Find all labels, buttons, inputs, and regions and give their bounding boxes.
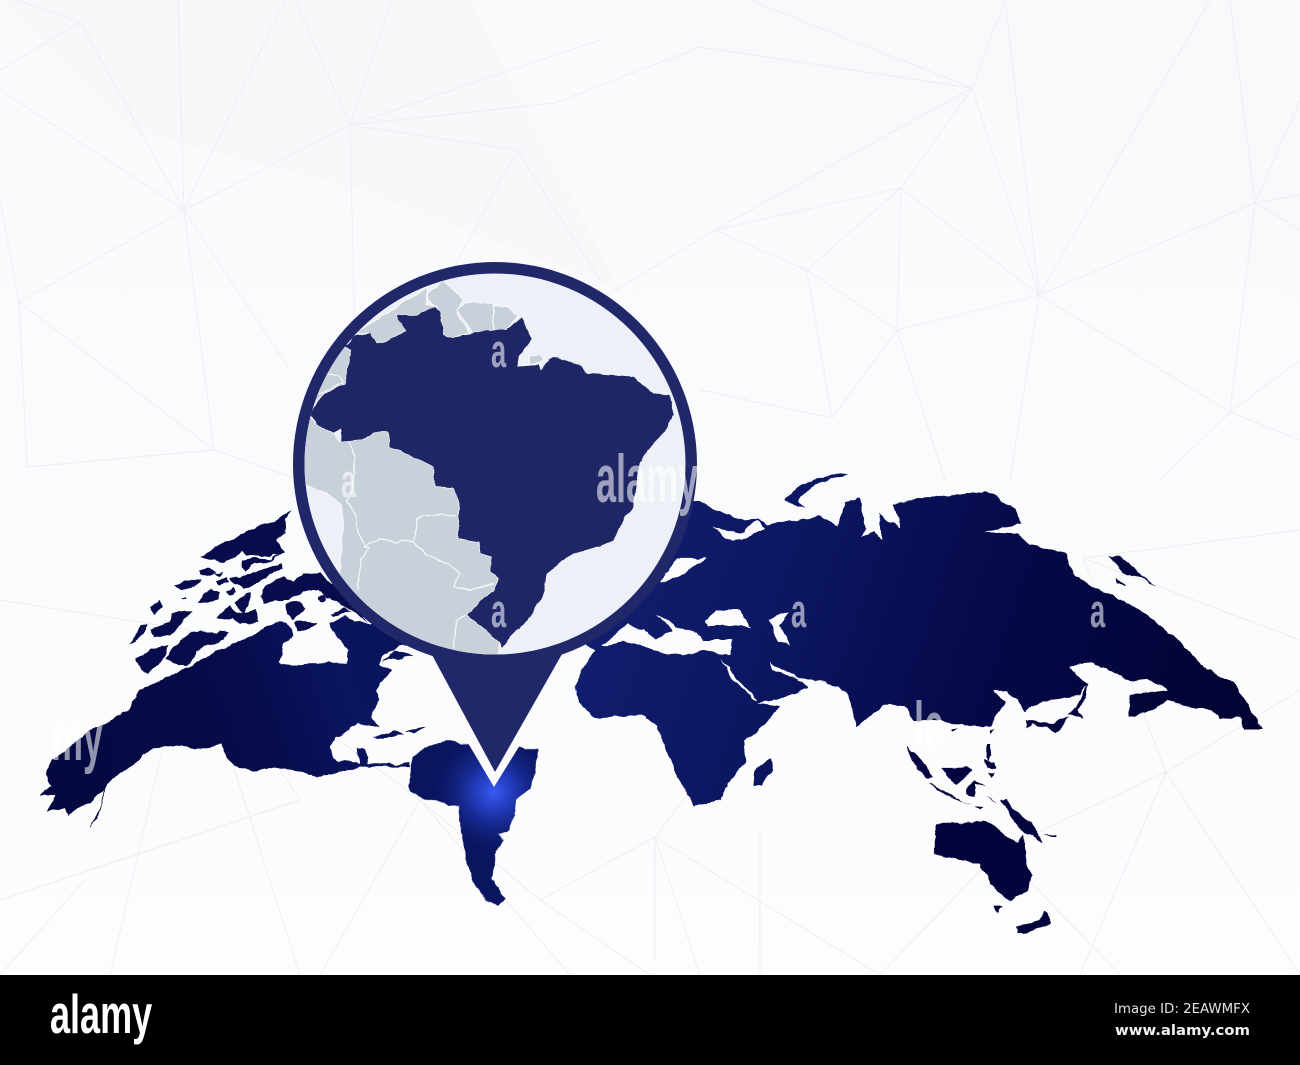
map pin <box>293 262 697 787</box>
arctic islands <box>130 511 367 675</box>
pin body <box>424 640 570 772</box>
image id: Image ID: 2EAWMFX <box>1114 1001 1250 1017</box>
country borders <box>318 373 494 648</box>
location glow <box>434 742 538 852</box>
inland seas <box>601 520 804 702</box>
watermark overlays: a <box>491 585 507 638</box>
pin halo <box>410 645 582 787</box>
watermark overlays: a <box>791 585 807 638</box>
world map rounded <box>38 473 1262 933</box>
continent: Eurasia and Africa <box>574 473 1262 933</box>
Brazil <box>310 307 673 648</box>
watermark overlays: alamy <box>596 441 698 517</box>
continent: South America <box>409 741 539 905</box>
website: www.alamy.com <box>1115 1023 1250 1039</box>
neighbouring countries <box>300 280 543 663</box>
island: Newfoundland and Caribbean <box>373 650 428 739</box>
watermark overlays: my <box>51 699 103 775</box>
footer logo: alamy <box>50 983 152 1045</box>
hudson bay <box>273 615 348 666</box>
southeast asia islands and japan <box>907 682 1088 845</box>
footer bar <box>0 975 1300 1065</box>
inset map of Brazil <box>300 280 673 663</box>
continent: North America <box>38 615 417 828</box>
pin ring <box>293 262 697 666</box>
watermark overlays: le <box>914 688 944 764</box>
watermark overlays: a <box>1090 585 1106 638</box>
watermark overlays <box>51 325 1106 775</box>
pin inner disc <box>304 274 686 654</box>
watermark overlays: a <box>491 325 507 378</box>
watermark overlays: a <box>341 455 357 508</box>
